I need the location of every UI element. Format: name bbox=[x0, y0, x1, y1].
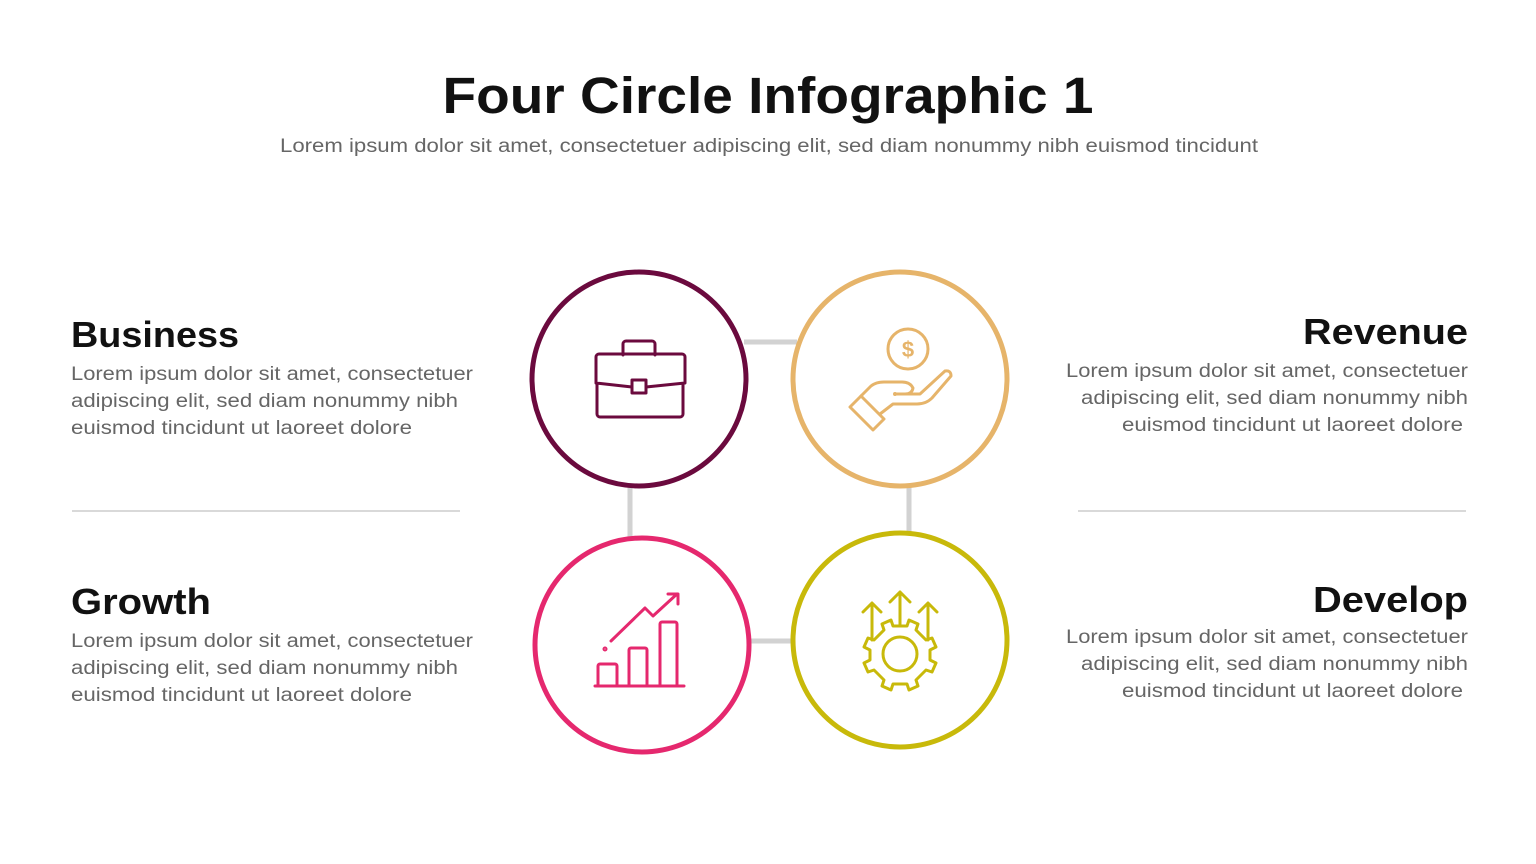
panel: revenue: Lorem ipsum dolor sit amet, consectetuer bbox=[1066, 361, 1469, 382]
panel: business bbox=[71, 314, 474, 439]
title: Four Circle Infographic 1 bbox=[442, 67, 1094, 124]
panel: develop: Develop bbox=[1313, 579, 1468, 620]
panel: revenue: euismod tincidunt ut laoreet dolore bbox=[1122, 415, 1463, 436]
panel: revenue: adipiscing elit, sed diam nonummy nibh bbox=[1081, 388, 1468, 409]
icon: bar chart bbox=[595, 594, 684, 686]
circle: business bbox=[532, 272, 746, 486]
panel: growth: adipiscing elit, sed diam nonummy nibh bbox=[71, 658, 458, 679]
panel: revenue bbox=[1066, 311, 1469, 436]
icon: briefcase bbox=[596, 341, 685, 417]
panel: business: Business bbox=[71, 314, 239, 355]
panel: develop: euismod tincidunt ut laoreet dolore bbox=[1122, 681, 1463, 702]
panel: develop: adipiscing elit, sed diam nonummy nibh bbox=[1081, 654, 1468, 675]
icon: hand with coin bbox=[850, 329, 951, 430]
panel: business: euismod tincidunt ut laoreet dolore bbox=[71, 418, 412, 439]
circle: growth bbox=[535, 538, 749, 752]
subtitle: Lorem ipsum dolor sit amet, consectetuer adipiscing elit, sed diam nonummy nibh euismod tincidunt bbox=[280, 136, 1259, 157]
circle: develop bbox=[793, 533, 1007, 747]
panel: business: adipiscing elit, sed diam nonummy nibh bbox=[71, 391, 458, 412]
circle: revenue bbox=[793, 272, 1007, 486]
panel: develop bbox=[1066, 579, 1469, 702]
icon: hand with coin: $ bbox=[902, 337, 914, 362]
panel: growth: Growth bbox=[71, 581, 211, 622]
panel: develop: Lorem ipsum dolor sit amet, consectetuer bbox=[1066, 627, 1469, 648]
panel: growth: euismod tincidunt ut laoreet dolore bbox=[71, 685, 412, 706]
panel: business: Lorem ipsum dolor sit amet, consectetuer bbox=[71, 364, 474, 385]
panel: growth bbox=[71, 581, 474, 706]
panel: growth: Lorem ipsum dolor sit amet, consectetuer bbox=[71, 631, 474, 652]
panel: revenue: Revenue bbox=[1303, 311, 1468, 352]
icon: gear with arrows bbox=[863, 592, 937, 690]
